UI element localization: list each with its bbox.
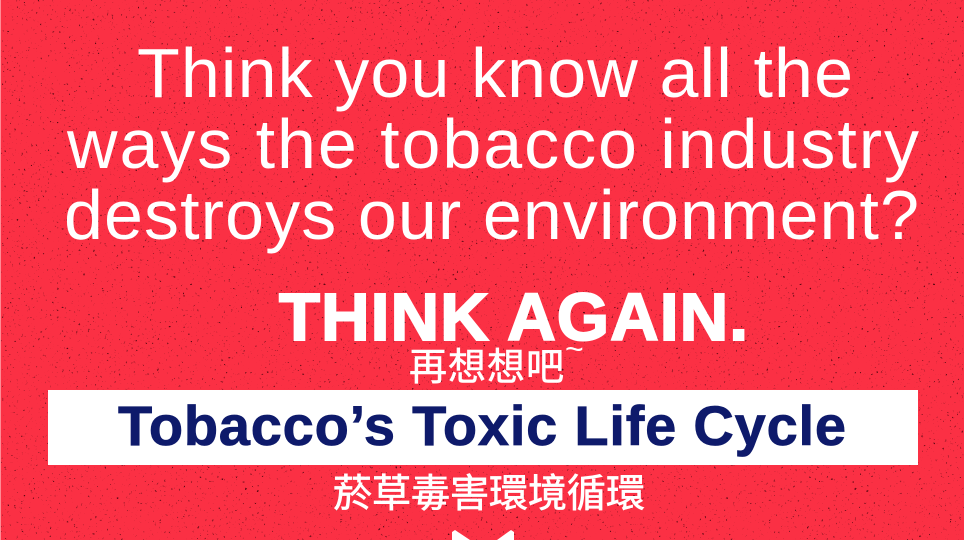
Chinese subheading: ~ — [565, 331, 584, 367]
heading: Think you know all the ways: ways the tobacco industry — [66, 105, 919, 183]
heading: Think you know all the ways: Think you know all the — [137, 34, 853, 112]
Chinese title: 菸草毒害環境循環 — [333, 473, 645, 516]
icon: partially visible white shape — [452, 530, 514, 540]
title banner — [48, 390, 918, 465]
Chinese subheading — [409, 331, 584, 389]
banner title text: Tobacco’s Toxic Life Cycle — [118, 394, 846, 457]
Chinese subheading: 再想想吧 — [409, 347, 564, 389]
heading: Think you know all the ways — [64, 34, 919, 254]
subheading: THINK AGAIN.: THINK AGAIN. — [279, 280, 748, 355]
heading: Think you know all the ways: destroys our environment? — [64, 176, 919, 254]
